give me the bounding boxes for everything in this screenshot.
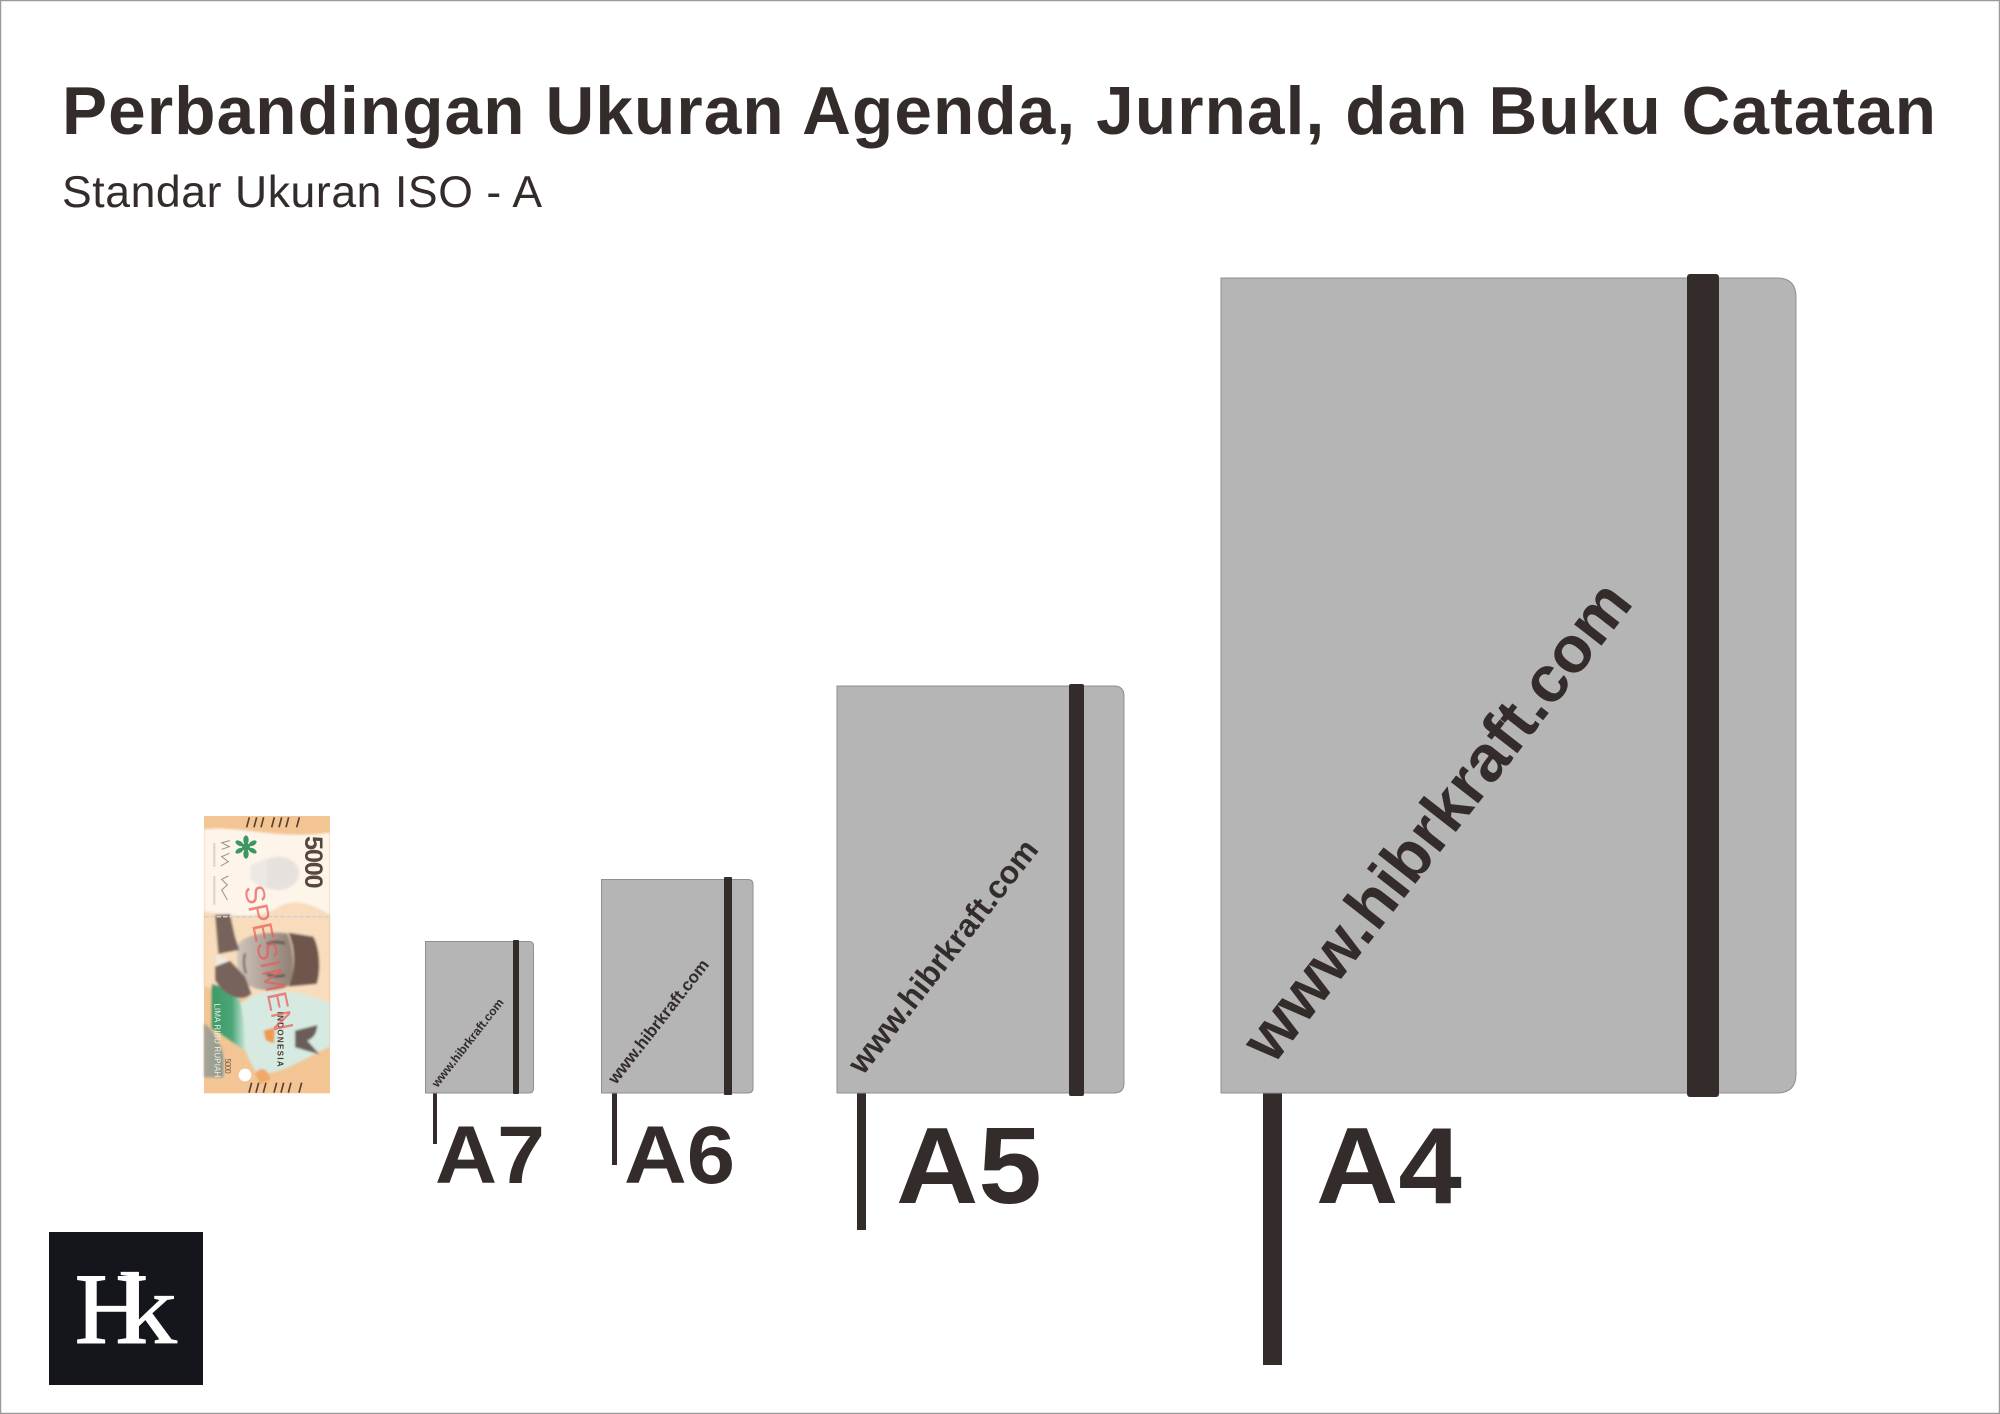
- banknote for scale: [204, 816, 330, 1093]
- A7 cover: [426, 942, 534, 1093]
- A5 elastic band: [1069, 684, 1084, 1096]
- notebook A5: [837, 684, 1124, 1230]
- banknote for scale: 5000: [223, 1058, 232, 1074]
- signatures: [221, 841, 230, 900]
- watermark portrait: [258, 857, 299, 890]
- portrait: [237, 932, 293, 990]
- banknote for scale: INDONESIA: [275, 1012, 284, 1067]
- A4 label: A4: [1316, 1105, 1462, 1226]
- logo Hk: H: [75, 1253, 148, 1365]
- A7 watermark: www.hibrkraft.com: [428, 996, 507, 1091]
- emblem: [295, 1025, 319, 1054]
- A5 label: A5: [896, 1105, 1042, 1226]
- A6 elastic band: [724, 877, 732, 1095]
- banknote for scale: 5000: [299, 836, 327, 889]
- logo Hk: [49, 1232, 203, 1385]
- notebook A4: [1221, 274, 1796, 1365]
- flower: [234, 835, 258, 859]
- title: Perbandingan Ukuran Agenda, Jurnal, dan Buku Catatan: [62, 74, 1936, 149]
- subtitle: Standar Ukuran ISO - A: [62, 168, 542, 217]
- A4 watermark: www.hibrkraft.com: [1226, 567, 1646, 1075]
- A6 label: A6: [624, 1109, 735, 1200]
- A4 cover: [1221, 278, 1796, 1093]
- A5 watermark: www.hibrkraft.com: [840, 832, 1045, 1081]
- A7 ribbon: [433, 1093, 437, 1144]
- A4 elastic band: [1687, 274, 1719, 1097]
- A5 ribbon: [857, 1093, 866, 1230]
- A7 label: A7: [435, 1109, 545, 1201]
- banknote for scale: LIMA RIBU RUPIAH: [212, 1003, 221, 1078]
- security stripes: [247, 817, 299, 827]
- notebook A6: [602, 877, 753, 1200]
- banknote for scale: SPESIMEN: [238, 882, 299, 1034]
- A6 ribbon: [612, 1093, 617, 1165]
- A6 watermark: www.hibrkraft.com: [604, 956, 713, 1088]
- logo Hk: k: [119, 1252, 177, 1365]
- A5 cover: [837, 686, 1124, 1093]
- A7 elastic band: [513, 940, 519, 1094]
- notebook A7: [426, 940, 545, 1201]
- A4 ribbon: [1263, 1093, 1282, 1365]
- A6 cover: [602, 880, 753, 1093]
